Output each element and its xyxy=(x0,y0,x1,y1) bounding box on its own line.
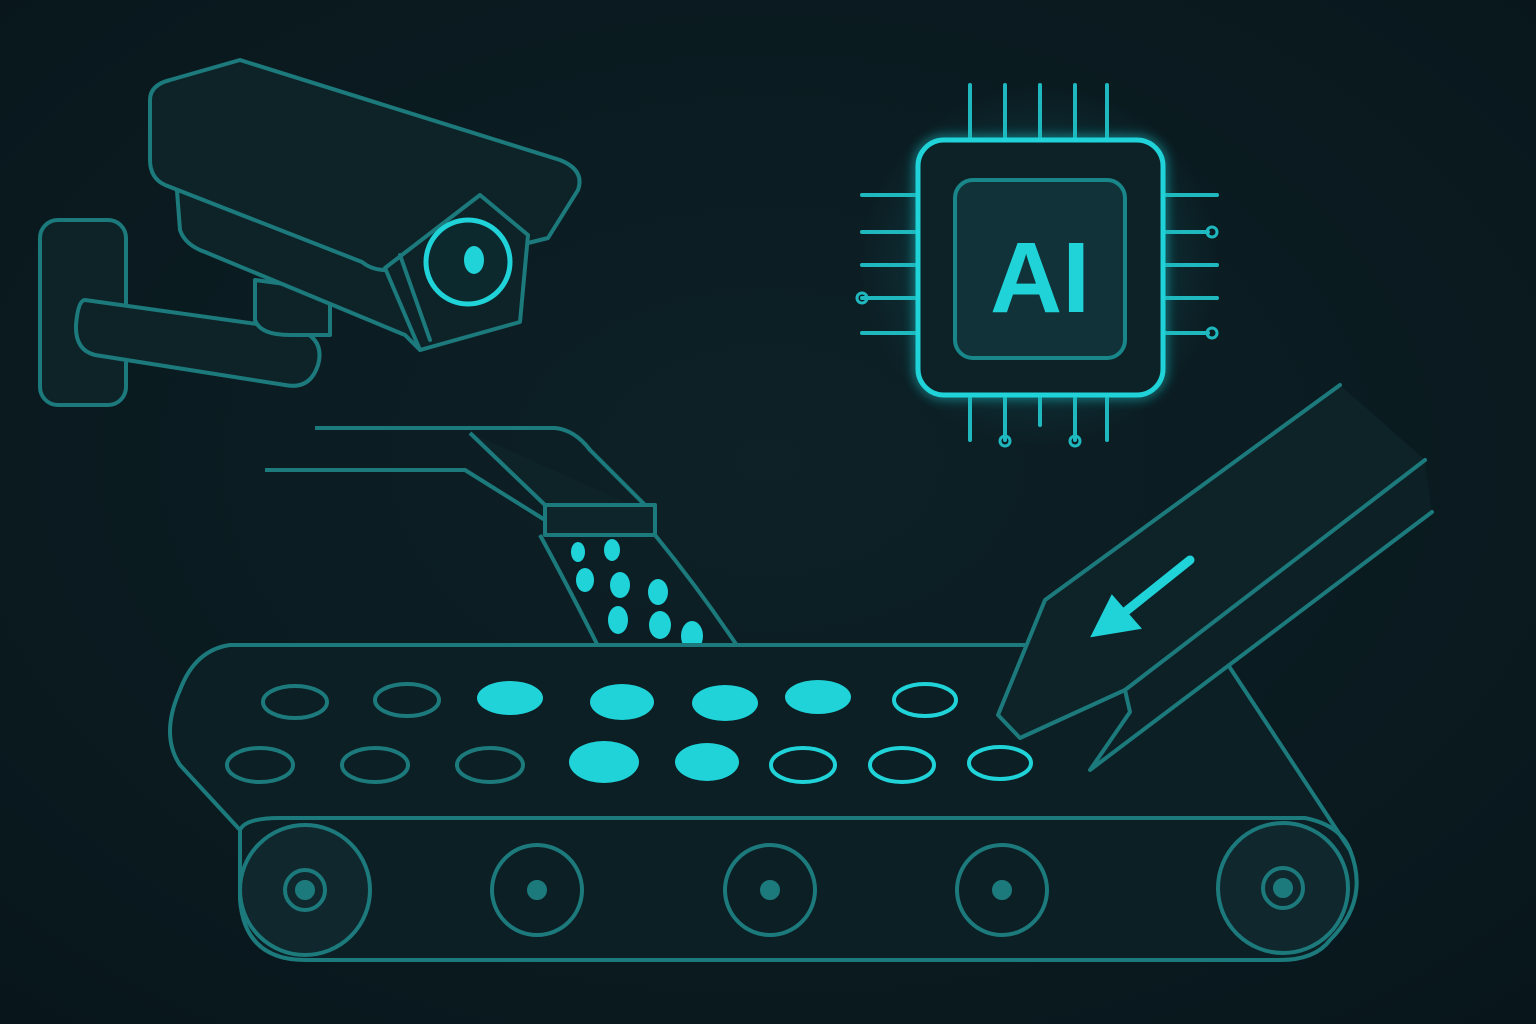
hopper feed xyxy=(265,428,740,650)
arrow: push direction xyxy=(1092,560,1190,636)
icon: security camera xyxy=(40,60,580,405)
chip label: AI xyxy=(990,222,1090,334)
falling pellets xyxy=(571,539,709,680)
icon: camera lens xyxy=(426,220,510,304)
conveyor belt xyxy=(170,645,1357,960)
icon: AI chip xyxy=(857,85,1220,446)
reject pusher arm xyxy=(998,385,1432,770)
pellets on belt xyxy=(227,680,1031,783)
